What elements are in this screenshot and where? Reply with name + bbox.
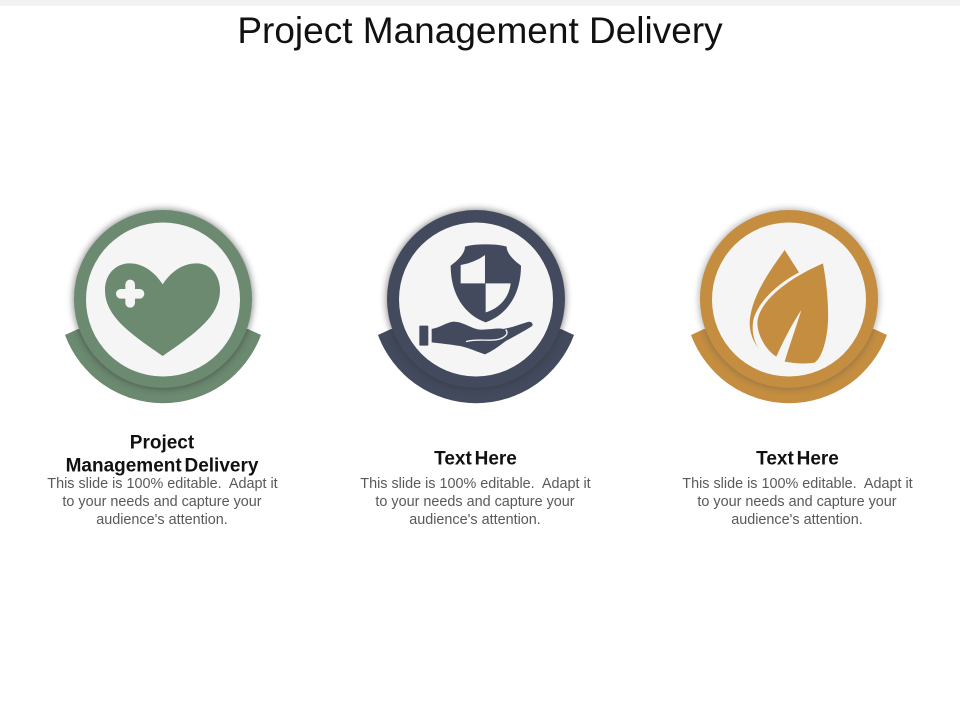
- badge ring: [387, 210, 565, 388]
- text block: project management delivery: to your needs and capture your: [62, 494, 262, 510]
- icon: shield over hand: [419, 244, 533, 354]
- text block: project management delivery: Management Delivery: [66, 456, 259, 476]
- text block: third column: audience's attention.: [731, 512, 863, 528]
- text block: second column: Text Here: [434, 448, 517, 470]
- panel: leaf badge: [691, 209, 887, 403]
- icon: heart with plus: [105, 263, 220, 356]
- text block: second column: This slide is 100% editable. Adapt it: [360, 476, 591, 492]
- title: Project Management Delivery: [237, 10, 723, 51]
- text block: second column: [360, 448, 591, 528]
- text block: project management delivery: audience's attention.: [96, 512, 228, 528]
- text block: second column: audience's attention.: [409, 512, 541, 528]
- text block: second column: to your needs and capture your: [375, 494, 575, 510]
- badge lower arc: [691, 329, 887, 403]
- badge ring: [74, 210, 252, 388]
- badge lower arc: [65, 329, 261, 403]
- badge ring: [700, 210, 878, 388]
- text block: project management delivery: [47, 432, 278, 528]
- text block: project management delivery: Project: [130, 432, 195, 454]
- panel: heart badge: [65, 209, 261, 403]
- text block: third column: to your needs and capture your: [697, 494, 897, 510]
- text block: project management delivery: This slide is 100% editable. Adapt it: [47, 476, 278, 492]
- text block: third column: [682, 448, 913, 528]
- text block: third column: Text Here: [756, 448, 839, 470]
- badge lower arc: [378, 329, 574, 403]
- text block: third column: This slide is 100% editable. Adapt it: [682, 476, 913, 492]
- panel: shield badge: [378, 209, 574, 403]
- icon: leaves: [750, 250, 828, 364]
